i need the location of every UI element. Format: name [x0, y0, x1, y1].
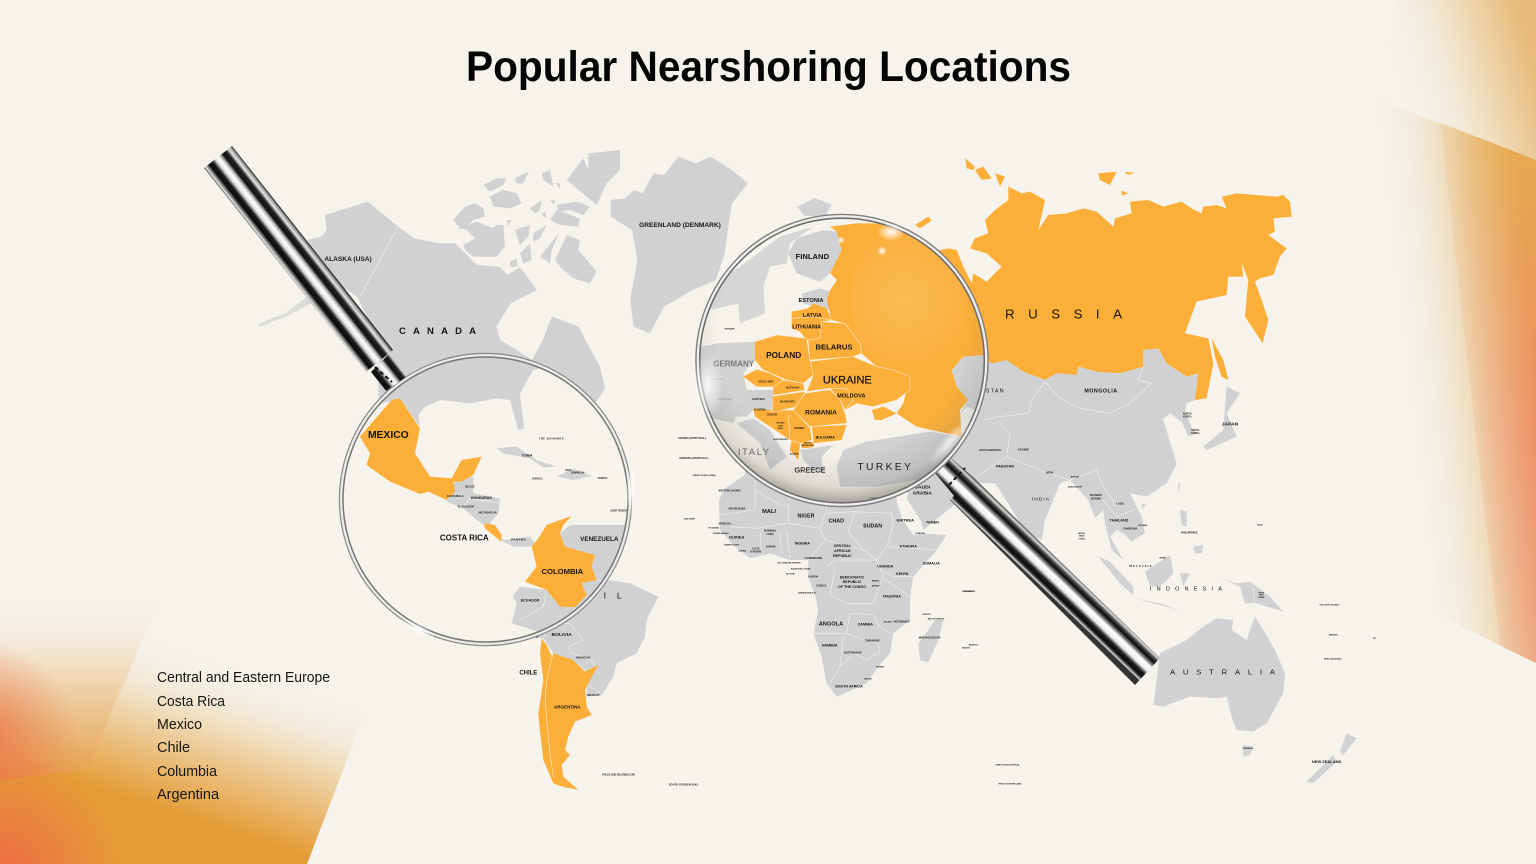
Africa and Arabia: CABO VERDE: [684, 517, 696, 520]
Africa and Arabia: CONGO: [816, 583, 826, 587]
South America: PARAGUAY: [576, 656, 591, 660]
Africa and Arabia: COMOROS: [922, 614, 932, 616]
Africa and Arabia: SAO TOME AND PRINCIPE: [777, 562, 801, 565]
right lens: SLOVENIA: [754, 408, 766, 411]
South America: CHILE: [519, 670, 537, 676]
Africa and Arabia: MOZAMBIQUE: [894, 620, 910, 623]
Africa and Arabia: RWANDA: [872, 580, 880, 583]
South Asia, South-East Asia and Oceania: LAOS: [1116, 501, 1124, 505]
left lens: COSTA RICA: [440, 534, 489, 543]
South Asia, South-East Asia and Oceania: HEARD ISLAND (AUSTRALIA): [996, 763, 1020, 766]
right lens: CZECH REP.: [758, 379, 774, 383]
right lens glints: [692, 223, 976, 470]
Africa and Arabia: D'IVOIRE: [750, 550, 762, 554]
Africa and Arabia: REPUBLIC: [833, 554, 852, 558]
Africa and Arabia: DEMOCRATIC: [840, 575, 865, 579]
Africa and Arabia: GUINEA: [729, 534, 745, 539]
South Asia, South-East Asia and Oceania: BRUNEI: [1159, 558, 1166, 560]
left lens: BOLIVIA: [550, 632, 573, 638]
left lens: NICARAGUA: [479, 511, 498, 515]
left lens: THE BAHAMAS: [539, 437, 564, 441]
South Asia, South-East Asia and Oceania: INDIA: [1032, 496, 1050, 502]
right lens: MOLDOVA: [837, 393, 866, 399]
left handle collar: [371, 354, 406, 391]
Baltics: [792, 303, 832, 340]
Russia highlighted: SOUTH: [1191, 430, 1200, 432]
Africa and Arabia: COTE: [752, 546, 760, 550]
South America: ARGENTINA: [554, 705, 581, 710]
South Asia, South-East Asia and Oceania: FIJI: [1373, 638, 1376, 640]
right lens: UKRAINE: [823, 374, 872, 386]
South Asia, South-East Asia and Oceania: VIETNAM: [1138, 524, 1147, 527]
left lens ring: [340, 354, 632, 646]
right lens: BOSNIA: [777, 422, 785, 425]
Africa and Arabia: SEYCHELLES: [962, 591, 976, 593]
Crimea: [872, 407, 897, 420]
right handle collar: [935, 457, 973, 497]
Russia highlighted: KOREA: [1183, 415, 1192, 418]
Russia highlighted: MONGOLIA: [1084, 388, 1118, 394]
location list: Costa Rica: [157, 693, 226, 710]
Russia highlighted: NORTH: [1183, 413, 1192, 415]
South Asia, South-East Asia and Oceania: GUINEA: [1258, 596, 1265, 599]
location list: Argentina: [157, 786, 220, 803]
South Asia, South-East Asia and Oceania: FRENCH SOUTHERN LANDS: [999, 783, 1022, 786]
right lens: GERMANY: [713, 360, 755, 369]
Africa and Arabia: CANARY ISLANDS (SPAIN): [692, 474, 716, 477]
right lens: SWITZERLAND: [718, 398, 733, 401]
Africa and Arabia: MAURITIUS: [969, 644, 979, 647]
right lens: MONTENEGRO: [773, 439, 788, 441]
location list: Chile: [157, 739, 190, 756]
North America: [257, 157, 748, 407]
right lens: MACEDONIA: [802, 444, 814, 447]
right lens: FINLAND: [796, 252, 830, 261]
Africa and Arabia: AFRICAN: [834, 549, 851, 553]
South Asia, South-East Asia and Oceania: NEW: [1259, 595, 1264, 597]
right lens: CYPRUS: [869, 496, 881, 500]
South America: PE: [523, 628, 539, 640]
South Asia, South-East Asia and Oceania: TASMANIA: [1242, 747, 1253, 750]
Africa and Arabia: CABINDA (ANGOLA): [798, 591, 816, 594]
right lens: LITHUANIA: [792, 325, 821, 331]
Africa and Arabia: LESOTHO: [864, 678, 873, 680]
Hungary: [772, 392, 805, 412]
left lens: JAMAICA: [532, 477, 543, 480]
left lens: HONDURAS: [471, 496, 492, 500]
right lens: HERZ.: [778, 428, 784, 430]
South Asia, South-East Asia and Oceania: NEW ZEALAND: [1312, 759, 1341, 764]
South Asia, South-East Asia and Oceania: PHILIPPINES: [1181, 530, 1198, 534]
Balkans: [753, 408, 812, 443]
glass shading: [700, 317, 984, 504]
right lens: LATVIA: [803, 313, 822, 319]
Chile and Argentina tip in lens: [542, 638, 553, 660]
Mexico: [360, 398, 482, 500]
South Asia, South-East Asia and Oceania: PAKISTAN: [996, 465, 1014, 469]
Belarus: [808, 322, 862, 360]
left handle: [204, 146, 393, 372]
South America in lens: [512, 525, 625, 632]
Iceland: [797, 198, 832, 216]
South Asia, South-East Asia and Oceania: INDIAN: [1079, 535, 1085, 538]
left lens: SAINT VINCENT: [610, 509, 629, 512]
Africa and Arabia: ZIMBABWE: [865, 638, 880, 642]
right lens: TURKEY: [857, 462, 913, 473]
right lens: GREECE: [795, 466, 826, 475]
left lens: VENEZUELA: [580, 536, 619, 543]
South America: B R A Z I L: [538, 590, 622, 600]
Scandinavia, UK and continental grey land: [710, 226, 813, 324]
South America: SOUTH GEORGIA (UK): [669, 782, 698, 786]
right lens: HUNGARY: [780, 400, 795, 404]
Russia highlighted: KAZAKHSTAN: [957, 388, 1005, 394]
left magnifier: [204, 146, 650, 662]
Africa and Arabia: GHANA: [766, 544, 776, 548]
Africa and Arabia: SUDAN: [863, 524, 882, 530]
Africa and Arabia: ETHIOPIA: [900, 545, 917, 549]
right lens: ROMANIA: [805, 409, 837, 416]
South Asia, South-East Asia and Oceania: AFGHANISTAN: [979, 448, 1001, 452]
title: Popular Nearshoring Locations: [466, 43, 1071, 91]
Bulgaria: [812, 425, 847, 443]
Africa and Arabia: OF THE CONGO: [838, 585, 866, 589]
left lens: ECUADOR: [521, 599, 540, 603]
Africa and Arabia: UGANDA: [877, 565, 894, 569]
Africa and Arabia: SOUTH AFRICA: [835, 685, 863, 689]
Africa and Arabia: EQUATORIAL GUINEA: [791, 568, 811, 571]
Africa and Arabia: NIGERIA: [795, 542, 810, 546]
right lens: BELARUS: [815, 342, 852, 351]
South Asia, South-East Asia and Oceania: CAMBODIA: [1123, 527, 1137, 531]
right lens: NORTH: [804, 443, 812, 445]
South Asia, South-East Asia and Oceania: VANUATU: [1329, 634, 1339, 637]
right lens: ESTONIA: [798, 298, 824, 304]
Africa and Arabia: CHAD: [829, 518, 844, 524]
Africa and Arabia: THE GAMBIA: [708, 527, 719, 530]
Africa and Arabia: DJIBOUTI: [916, 533, 925, 535]
Africa and Arabia: FASO: [766, 532, 774, 536]
right lens: BULGARIA: [816, 436, 835, 440]
Russia highlighted: RUSSIA: [1005, 307, 1122, 322]
left lens: BELIZE: [465, 484, 475, 488]
Arctic islands: [453, 150, 620, 283]
USA in lens: [381, 356, 540, 430]
South Asia, South-East Asia and Oceania: MALAYSIA: [1129, 564, 1153, 568]
right lens: AUSTRIA: [752, 397, 766, 401]
right handle: [950, 477, 1160, 685]
location list: [157, 669, 330, 803]
South Asia, South-East Asia and Oceania: BANGLADESH: [1068, 486, 1083, 489]
South Asia, South-East Asia and Oceania: KASHMIR: [1018, 448, 1029, 451]
Africa and Arabia: BURUNDI: [872, 586, 880, 588]
right lens: DENMARK: [725, 327, 735, 330]
world map: [257, 150, 1376, 790]
left lens: EL SALVADOR: [458, 506, 474, 509]
label: tiny Atlantic and European captions: [678, 436, 709, 460]
Africa and Arabia: MADAGASCAR: [919, 635, 941, 639]
Czech Republic: [743, 369, 783, 387]
Africa and Arabia: SAO TOME: [786, 572, 796, 575]
South Asia, South-East Asia and Oceania: NEPAL: [1046, 471, 1054, 474]
location list: Central and Eastern Europe: [157, 669, 330, 686]
Africa and Arabia: CAMEROON: [804, 556, 822, 560]
Ukraine: [807, 357, 910, 410]
left lens: HAITI: [565, 469, 572, 472]
Russia highlighted: KOREA: [1191, 432, 1200, 435]
label: tiny Atlantic and European captions: MADEIRA (PORTUGAL): [679, 456, 709, 460]
Moldova: [831, 389, 845, 410]
South Asia, South-East Asia and Oceania: BRITISH: [1078, 533, 1086, 535]
gradient accent: top right: [1398, 0, 1536, 663]
Africa and Arabia: NAMIBIA: [822, 644, 838, 648]
South Asia, South-East Asia and Oceania: OCEAN: [1079, 537, 1085, 540]
Africa and Arabia: [684, 450, 979, 697]
South America: URUGUAY: [587, 693, 600, 697]
South America: [510, 580, 698, 790]
Africa and Arabia: YEMEN: [926, 521, 939, 525]
Slovakia: [773, 380, 805, 395]
left lens: CUBA: [522, 453, 533, 457]
Africa and Arabia: MALAWI: [884, 620, 892, 623]
right magnifier: [157, 214, 1160, 803]
South Asia, South-East Asia and Oceania: MAURITIUS: [964, 590, 974, 593]
left lens: MEXICO: [368, 430, 409, 441]
left lens: PUERTO: [598, 478, 608, 480]
left lens: PANAMA: [511, 537, 527, 541]
right lens: [690, 214, 1007, 510]
South Asia, South-East Asia and Oceania: MYANMAR: [1090, 494, 1102, 497]
South Asia, South-East Asia and Oceania: THAILAND: [1110, 519, 1129, 523]
Africa and Arabia: REPUBLIC: [843, 580, 862, 584]
Russia in lens: [826, 223, 985, 436]
left lens: DOMINICAN: [571, 472, 585, 475]
Africa and Arabia: NIGER: [798, 513, 815, 519]
labels: North America: CANADA: [399, 326, 476, 337]
Africa and Arabia: SOMALIA: [923, 562, 940, 566]
Africa and Arabia: MAURITANIA: [729, 507, 745, 511]
right lens: SERBIA: [794, 426, 804, 430]
right lens: SLOVAKIA: [786, 385, 799, 389]
South Asia, South-East Asia and Oceania: INDONESIA: [1150, 587, 1222, 593]
Africa and Arabia: SENEGAL: [719, 521, 732, 525]
location list: Columbia: [157, 763, 218, 780]
gradient accent: bottom left: [0, 585, 370, 864]
labels: North America: ALASKA (USA): [324, 256, 372, 263]
Costa Rica: [484, 523, 502, 542]
right lens: ITALY: [738, 447, 771, 457]
Africa and Arabia: ESWATINI: [876, 665, 884, 668]
right lens: CROATIA: [767, 413, 778, 416]
Colombia: [525, 516, 597, 607]
right lens: AND: [779, 424, 783, 427]
Africa and Arabia: MAYOTTE (FRANCE): [928, 618, 945, 621]
Romania: [793, 390, 847, 427]
Africa and Arabia: CENTRAL: [834, 544, 852, 548]
South Asia, South-East Asia and Oceania: (BURMA): [1091, 497, 1101, 500]
Africa and Arabia: KENYA: [896, 572, 909, 576]
South America: BOLIVIA: [552, 632, 572, 638]
Russia highlighted: JAPAN: [1222, 422, 1239, 428]
right lens: POLAND: [766, 350, 801, 360]
South Asia, South-East Asia and Oceania: [940, 420, 1376, 786]
Argentina and Chile: [545, 653, 598, 790]
location list: Mexico: [157, 716, 202, 733]
right lens: NETHERLANDS: [710, 378, 724, 381]
Africa and Arabia: BURKINA: [764, 529, 776, 533]
Africa and Arabia: SIERRA LEONE: [724, 544, 740, 547]
South Asia, South-East Asia and Oceania: PAPUA: [1258, 591, 1265, 594]
left lens: GUATEMALA: [447, 494, 464, 498]
Africa and Arabia: WESTERN SAHARA: [719, 489, 741, 492]
Africa and Arabia: ARABIA: [913, 491, 932, 497]
South Asia, South-East Asia and Oceania: PALAU: [1257, 524, 1264, 527]
Africa and Arabia: GUINEA-BISSAU: [713, 532, 729, 535]
South Asia, South-East Asia and Oceania: BHUTAN: [1071, 475, 1080, 478]
Africa and Arabia: ERITREA: [897, 518, 914, 523]
right lens: ALBANIA: [790, 453, 799, 456]
South Asia, South-East Asia and Oceania: SOLOMON ISLANDS: [1320, 603, 1340, 606]
Africa and Arabia: SAUDI: [915, 484, 931, 490]
left lens: COLOMBIA: [541, 567, 584, 576]
Africa and Arabia: LIBERIA: [738, 550, 747, 553]
Africa and Arabia: REUNION: [962, 648, 971, 650]
labels: North America: [324, 222, 721, 337]
Africa and Arabia: GABON: [808, 575, 818, 579]
Africa and Arabia: ZAMBIA: [858, 622, 873, 627]
South America: FALKLAND ISLANDS (UK): [602, 772, 635, 776]
left lens glints: [398, 464, 636, 643]
South Asia, South-East Asia and Oceania: NEW CALEDONIA: [1324, 657, 1342, 660]
labels: North America: GREENLAND (DENMARK): [639, 222, 721, 229]
South Asia, South-East Asia and Oceania: AUSTRALIA: [1170, 667, 1276, 676]
Africa and Arabia: BOTSWANA: [844, 651, 863, 655]
Kazakhstan and Caucasus: [952, 355, 984, 414]
left lens: [338, 352, 634, 646]
right lens ring: [696, 214, 988, 506]
Russia highlighted: CHINA: [1068, 435, 1113, 444]
label: tiny Atlantic and European captions: AZORES (PORTUGAL): [678, 436, 706, 440]
Africa and Arabia: TANZANIA: [882, 595, 901, 599]
Africa and Arabia: ANGOLA: [819, 621, 843, 627]
Poland: [755, 335, 813, 383]
Africa and Arabia: MALI: [762, 509, 776, 515]
Russia highlighted: [890, 158, 1292, 483]
